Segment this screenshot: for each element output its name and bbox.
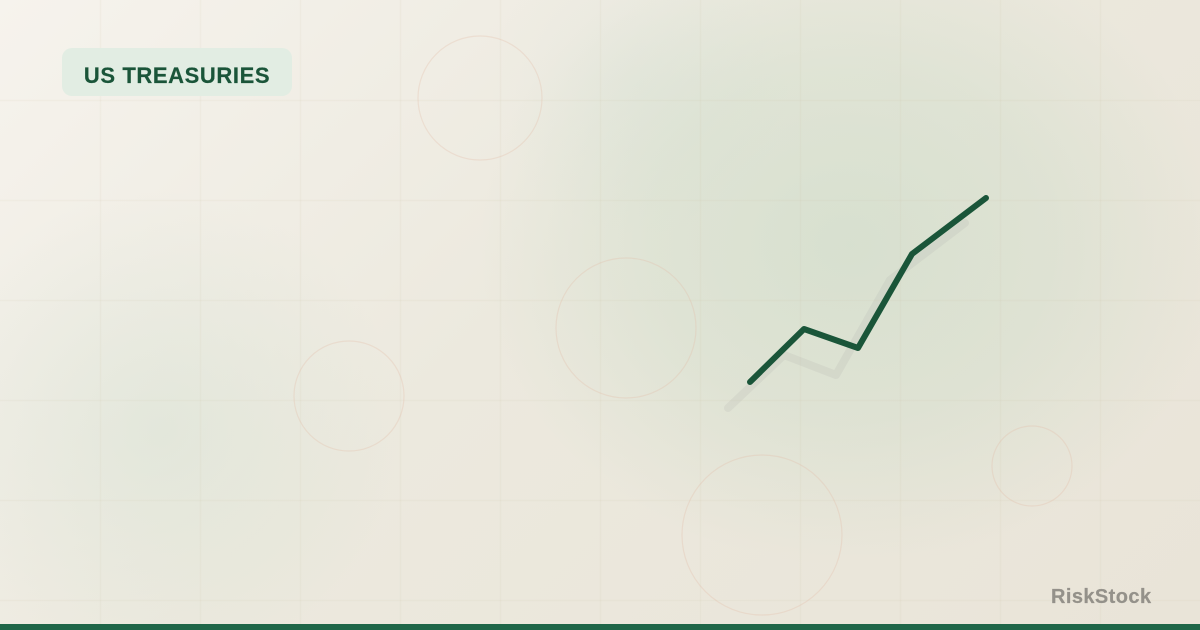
line chart (728, 198, 986, 408)
badge: category label: US TREASURIES (84, 63, 270, 88)
chart shadow (728, 223, 965, 408)
decorative circles (294, 36, 1072, 615)
chart line (750, 198, 986, 382)
brand wordmark: RiskStock (1051, 586, 1152, 608)
badge: category label (62, 48, 292, 96)
bottom accent bar (0, 624, 1200, 630)
